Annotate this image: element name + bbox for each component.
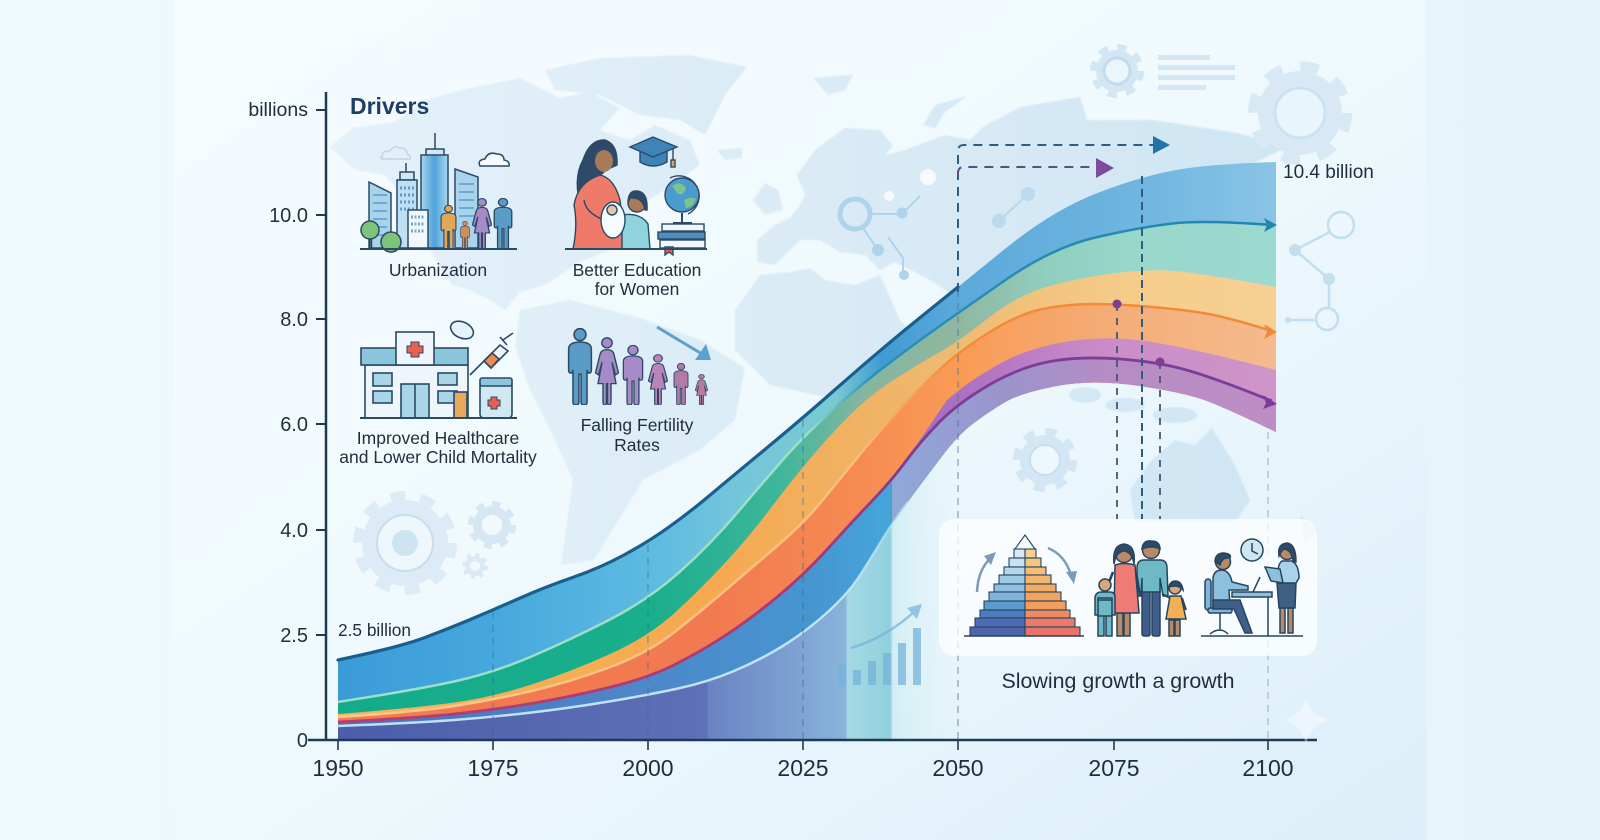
x axis labels: 1975 [467, 755, 519, 781]
annotation: 10.4 billion: 10.4 billion [1283, 162, 1374, 183]
stacked population area chart [338, 150, 1277, 740]
icon: population pyramid [964, 535, 1084, 636]
x axis labels: 2000 [622, 755, 674, 781]
x axis labels [312, 755, 1294, 781]
stacked bands [338, 150, 1276, 740]
driver: improved healthcare: and Lower Child Mortality [339, 447, 537, 467]
driver: better education for women: for Women [595, 279, 679, 299]
y axis labels: 4.0 [280, 520, 308, 542]
sparkle [1283, 698, 1330, 745]
decorative gear: lower left small [464, 554, 486, 578]
icon: shrinking family row [569, 329, 708, 405]
x axis labels: 2050 [932, 755, 984, 781]
driver: falling fertility rates [569, 327, 711, 455]
driver: improved healthcare [339, 318, 537, 467]
y axis labels: billions [248, 99, 308, 121]
y axis labels: 0 [297, 730, 308, 752]
arrow: falling trend [657, 327, 711, 360]
y axis labels: 6.0 [280, 414, 308, 436]
callout panel: slowing growth [939, 519, 1317, 656]
decorative text lines [1158, 55, 1235, 90]
decorative gear: top small [1093, 47, 1141, 95]
icon: city residents [441, 198, 512, 249]
y axis labels: 10.0 [269, 205, 308, 227]
y axis labels [248, 99, 308, 752]
x axis labels: 2075 [1088, 755, 1140, 781]
decorative gear: top right large [1253, 66, 1347, 160]
icon: mother and children [573, 137, 705, 255]
annotation: 2.5 billion: 2.5 billion [338, 620, 411, 640]
projection arrow: blue dashed [958, 136, 1170, 292]
driver: falling fertility rates: Rates [614, 435, 660, 455]
line arrowheads [1263, 218, 1277, 409]
peak markers and drop lines [1112, 176, 1164, 519]
decorative gear: lower left large [358, 496, 452, 590]
decorative gear: lower left medium [470, 504, 514, 546]
network nodes: europe [840, 169, 1035, 280]
band boundary lines [338, 222, 1272, 726]
axes [308, 92, 1317, 750]
driver: better education for women [565, 137, 707, 299]
caption: slowing growth: Slowing growth a growth [1002, 670, 1234, 693]
icon: office worker and colleague [1205, 539, 1299, 636]
label: Urbanization [389, 260, 487, 280]
world map backdrop [330, 55, 1318, 565]
network nodes: right side [1285, 212, 1354, 330]
projection arrow: purple dashed [958, 158, 1114, 178]
decorative gear: above Australia [1016, 432, 1074, 488]
mini bar chart with rising arrow [838, 604, 922, 685]
icon: family [1095, 541, 1186, 636]
label: Better Education [573, 260, 701, 280]
y axis labels: 8.0 [280, 309, 308, 331]
x axis labels: 2025 [777, 755, 829, 781]
arrows around pyramid [977, 548, 1077, 592]
heading: drivers: Drivers [350, 93, 429, 119]
driver: urbanization [360, 133, 517, 280]
period guide lines [493, 290, 1268, 740]
y axis labels: 2.5 [280, 625, 308, 647]
x axis labels: 2100 [1242, 755, 1294, 781]
icon: hospital, syringe and medicine [361, 318, 513, 418]
label: Improved Healthcare [357, 428, 519, 448]
icon: city with people [361, 133, 509, 252]
x axis labels: 1950 [312, 755, 364, 781]
base fill below the lowest curve [338, 424, 972, 740]
label: Falling Fertility [581, 415, 694, 435]
